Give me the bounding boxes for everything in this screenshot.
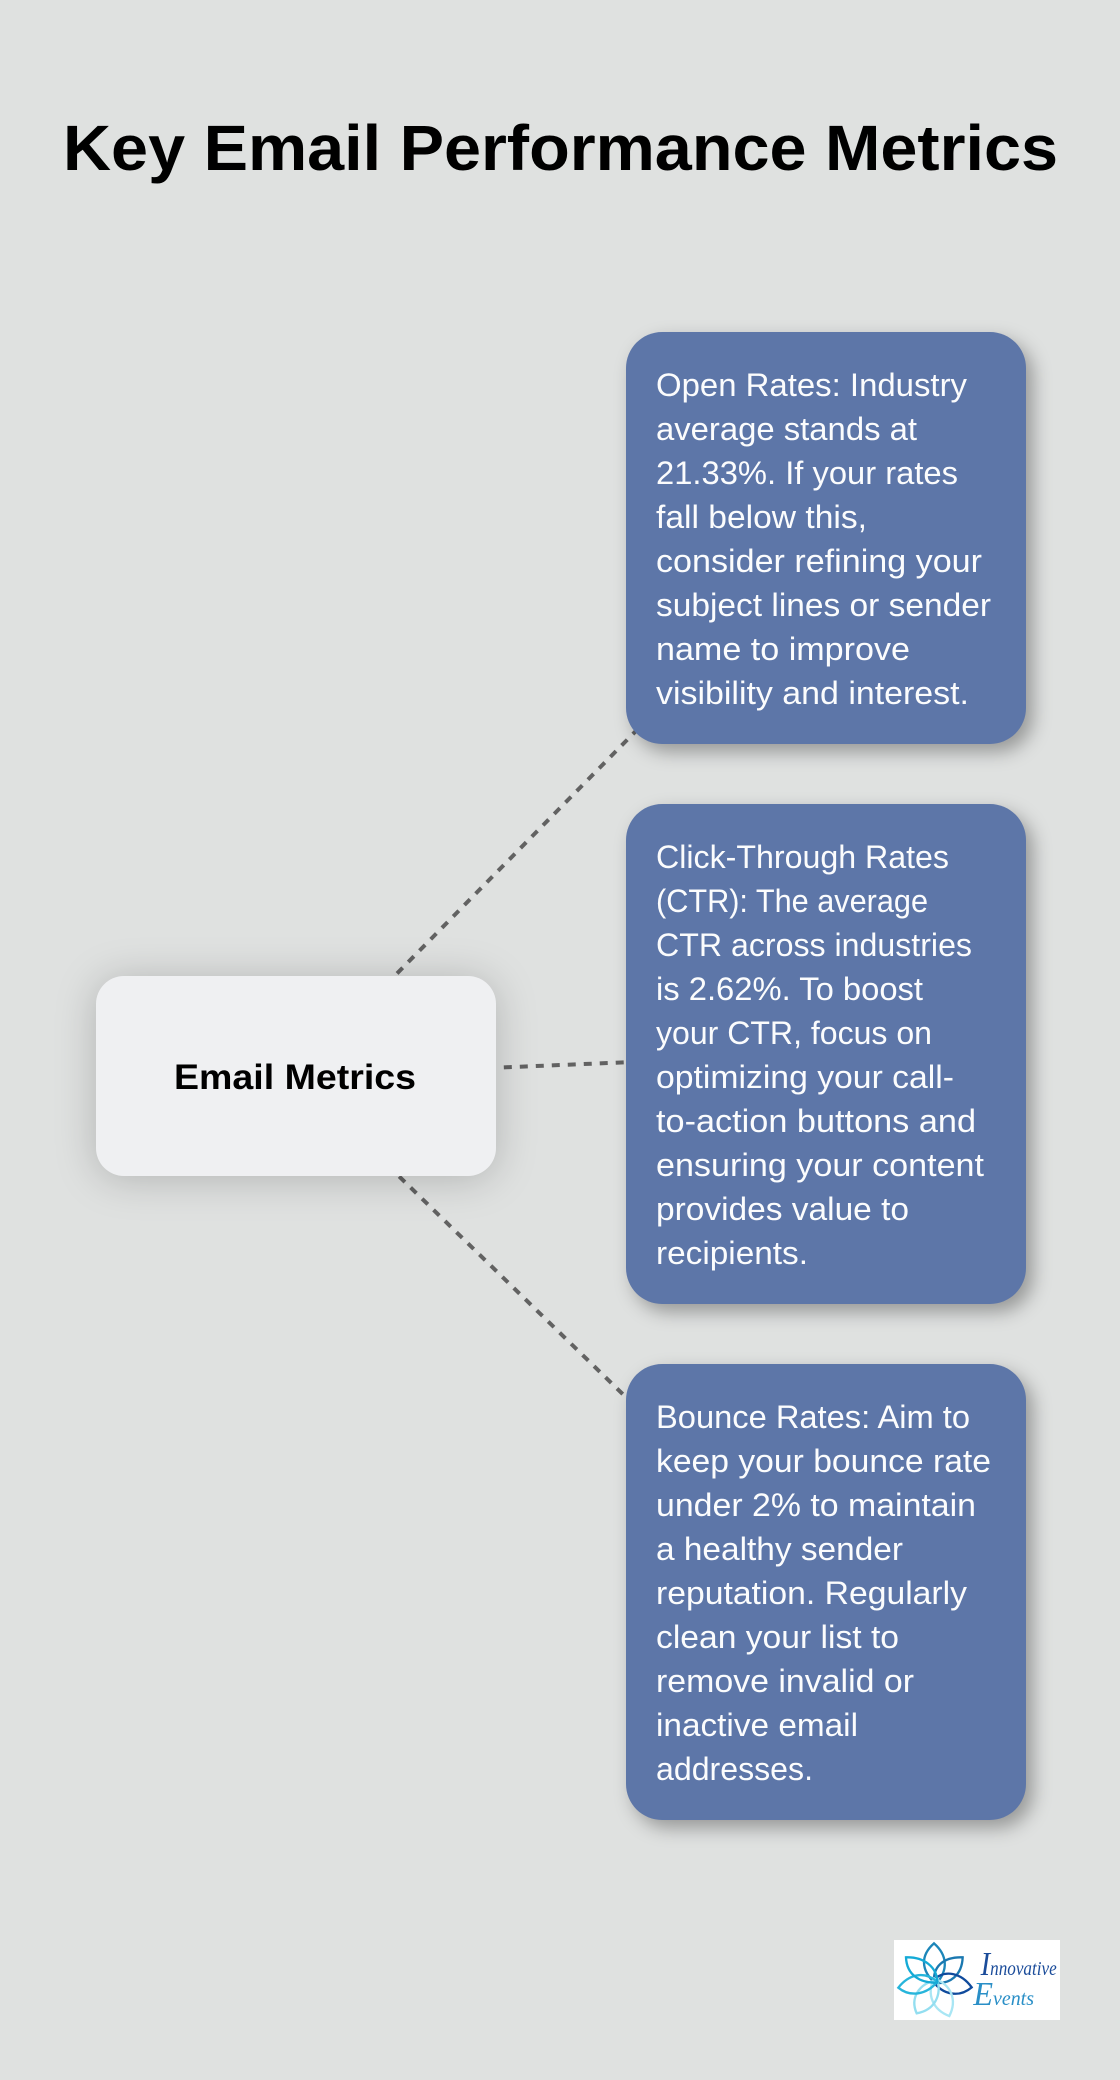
- open rates text: fall below this,: [656, 499, 867, 535]
- hub label: Email Metrics: [174, 1058, 416, 1097]
- panel: click-through rates: [626, 804, 1026, 1304]
- click-through rates text: (CTR): The average: [656, 883, 928, 919]
- bounce rates text: Bounce Rates: Aim to: [656, 1399, 970, 1435]
- open rates text: average stands at: [656, 411, 917, 447]
- bounce rates text: a healthy sender: [656, 1531, 903, 1567]
- click-through rates text: provides value to: [656, 1191, 909, 1227]
- click-through rates text: your CTR, focus on: [656, 1015, 932, 1051]
- click-through rates text: to-action buttons and: [656, 1103, 976, 1139]
- click-through rates text: ensuring your content: [656, 1147, 984, 1183]
- open rates text: Open Rates: Industry: [656, 367, 968, 403]
- panel: email metrics hub: [96, 976, 496, 1176]
- panel: open rates: [626, 332, 1026, 744]
- click-through rates text: CTR across industries: [656, 927, 972, 963]
- click-through rates text: recipients.: [656, 1235, 808, 1271]
- title: Key Email Performance Metrics: [63, 112, 1058, 184]
- click-through rates text: optimizing your call-: [656, 1059, 954, 1095]
- bounce rates text: remove invalid or: [656, 1663, 914, 1699]
- bounce rates text: keep your bounce rate: [656, 1443, 991, 1479]
- click-through rates text: [656, 839, 984, 1271]
- bounce rates text: reputation. Regularly: [656, 1575, 968, 1611]
- bounce rates text: [656, 1399, 991, 1787]
- open rates text: [656, 367, 991, 711]
- click-through rates text: Click-Through Rates: [656, 839, 949, 875]
- logo wordmark: [972, 1946, 1057, 2013]
- click-through rates text: is 2.62%. To boost: [656, 971, 923, 1007]
- logo wordmark: Innovative: [980, 1946, 1057, 1983]
- open rates text: 21.33%. If your rates: [656, 455, 958, 491]
- connector: hub to bounce rates: [296, 1076, 826, 1592]
- bounce rates text: addresses.: [656, 1751, 813, 1787]
- open rates text: visibility and interest.: [656, 675, 969, 711]
- logo wordmark: Events: [972, 1976, 1034, 2013]
- bounce rates text: inactive email: [656, 1707, 858, 1743]
- connector: hub to click-through rates: [296, 1054, 826, 1076]
- bounce rates text: clean your list to: [656, 1619, 899, 1655]
- panel: bounce rates: [626, 1364, 1026, 1820]
- bounce rates text: under 2% to maintain: [656, 1487, 976, 1523]
- icon: flower: [898, 1943, 972, 2016]
- open rates text: name to improve: [656, 631, 910, 667]
- connector: hub to open rates: [296, 538, 826, 1076]
- open rates text: consider refining your: [656, 543, 982, 579]
- logo: Innovative Events: [894, 1940, 1060, 2020]
- open rates text: subject lines or sender: [656, 587, 991, 623]
